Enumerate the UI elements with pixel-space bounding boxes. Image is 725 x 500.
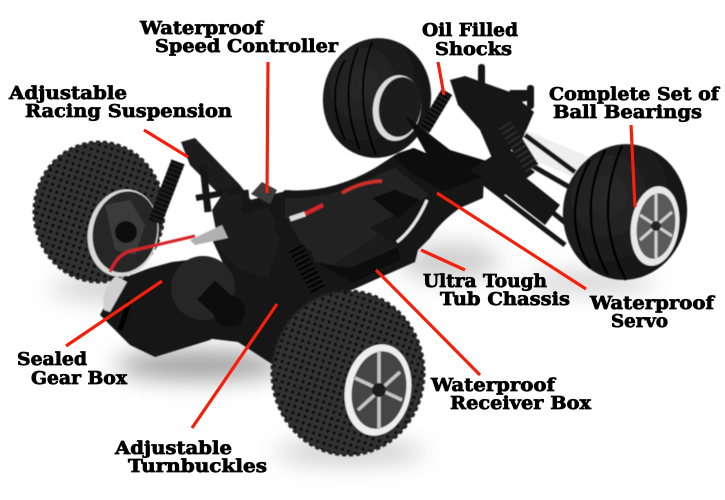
chassis base connecting tower, tub and arms bbox=[210, 190, 330, 318]
callout: ultra tough tub chassis: Tub Chassis bbox=[440, 290, 570, 310]
receiver box bbox=[312, 223, 400, 283]
callout: waterproof servo: Servo bbox=[611, 312, 668, 332]
callout: ultra tough tub chassis bbox=[421, 250, 570, 310]
rear shock and body mount bbox=[155, 138, 262, 245]
rear right wheel bbox=[272, 291, 424, 455]
front left wheel bbox=[315, 31, 439, 165]
callout: waterproof servo bbox=[437, 193, 716, 332]
rear right hub bbox=[338, 339, 418, 441]
callout: complete set of ball bearings bbox=[549, 85, 721, 207]
callout: waterproof speed controller: Speed Controller bbox=[155, 37, 339, 57]
callout: waterproof servo: Waterproof bbox=[589, 294, 716, 314]
callout: ultra tough tub chassis: Ultra Tough bbox=[423, 272, 547, 292]
callout: sealed gear box: Sealed bbox=[17, 350, 87, 370]
callout: waterproof receiver box bbox=[376, 270, 592, 414]
motor heatsink bbox=[251, 182, 277, 204]
callout: waterproof receiver box: Receiver Box bbox=[450, 394, 592, 414]
tub top deck bbox=[285, 168, 430, 252]
callout: adjustable turnbuckles bbox=[114, 304, 277, 477]
servo recess bbox=[372, 190, 420, 218]
callout: adjustable turnbuckles: Adjustable bbox=[114, 439, 232, 459]
ground shadows bbox=[50, 244, 655, 462]
main tub chassis bbox=[262, 148, 484, 302]
callout: oil filled shocks: Oil Filled bbox=[422, 21, 518, 41]
rear arms and turnbuckle bbox=[205, 278, 318, 366]
callout: adjustable turnbuckles: Turnbuckles bbox=[128, 457, 267, 477]
red power wires bbox=[290, 181, 382, 219]
side shock bbox=[280, 222, 318, 290]
front right hub bbox=[626, 183, 684, 269]
red motor wire bbox=[110, 236, 195, 272]
callout: waterproof speed controller: Waterproof bbox=[139, 19, 265, 39]
rear left wheel bbox=[34, 142, 166, 283]
front suspension and shock tower bbox=[405, 64, 592, 245]
front right wheel bbox=[554, 136, 696, 288]
callout: adjustable racing suspension: Adjustable bbox=[8, 84, 127, 104]
callout: oil filled shocks: Shocks bbox=[435, 40, 512, 60]
callout: sealed gear box: Gear Box bbox=[31, 369, 128, 389]
callout: complete set of ball bearings: Complete Set of bbox=[549, 85, 721, 105]
callout: waterproof receiver box: Waterproof bbox=[430, 376, 557, 396]
servo wire bbox=[397, 200, 427, 242]
clear wire tube bbox=[190, 225, 228, 245]
callout: oil filled shocks bbox=[422, 21, 518, 95]
callout: adjustable racing suspension: Racing Suspension bbox=[25, 102, 232, 122]
callout: waterproof speed controller bbox=[139, 19, 339, 193]
callout: complete set of ball bearings: Ball Bearings bbox=[553, 103, 702, 123]
centre tower bbox=[212, 190, 282, 278]
callout: adjustable racing suspension bbox=[8, 84, 232, 157]
callout: sealed gear box bbox=[17, 281, 162, 389]
truck chassis illustration bbox=[34, 31, 696, 455]
gear box bbox=[100, 256, 245, 357]
front plate bbox=[393, 148, 483, 191]
